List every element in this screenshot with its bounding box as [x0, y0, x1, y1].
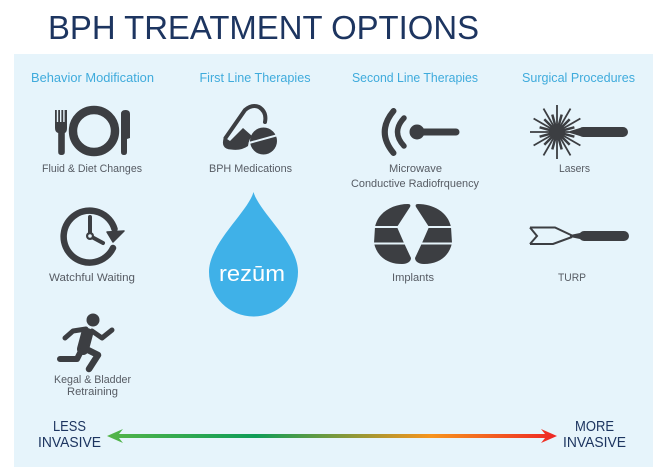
- label: less invasive: INVASIVE: [38, 435, 101, 451]
- icon: rezum water drop: [209, 192, 298, 316]
- label: BPH medications: BPH Medications: [209, 163, 292, 175]
- label: watchful waiting: Watchful Waiting: [49, 272, 135, 284]
- icon: prostate implants: [370, 204, 456, 264]
- heading: surgical procedures: Surgical Procedures: [522, 71, 635, 85]
- label: kegal and bladder retraining: [54, 374, 131, 398]
- label: fluid and diet changes: Fluid & Diet Changes: [42, 163, 142, 175]
- label: more invasive: INVASIVE: [563, 435, 626, 451]
- icon: clock with arrow: [64, 211, 124, 263]
- label: less invasive: [38, 419, 101, 451]
- heading: first line therapies: First Line Therapies: [200, 71, 310, 85]
- title: BPH TREATMENT OPTIONS: [48, 9, 479, 46]
- label: kegal and bladder retraining: Kegal & Bladder: [54, 374, 131, 386]
- icon: microwave probe: [385, 111, 456, 153]
- arrow: invasiveness scale: [107, 429, 557, 443]
- icon: medication pills: [223, 106, 278, 154]
- icon: TURP instrument: [530, 228, 629, 244]
- icon: running person: [60, 314, 112, 369]
- label: more invasive: MORE: [575, 419, 614, 435]
- icon: laser: [530, 105, 628, 159]
- icon: rezum water drop: rezūm: [219, 261, 285, 286]
- label: microwave conductive radiofrequency: Conductive Radiofrquency: [351, 178, 479, 190]
- label: microwave conductive radiofrequency: Microwave: [389, 163, 442, 175]
- label: less invasive: LESS: [53, 419, 86, 435]
- label: TURP: TURP: [558, 272, 586, 284]
- label: kegal and bladder retraining: Retraining: [67, 386, 118, 398]
- label: implants: Implants: [392, 272, 434, 284]
- heading: second line therapies: Second Line Therapies: [352, 71, 478, 85]
- label: more invasive: [563, 419, 626, 451]
- label: lasers: Lasers: [559, 163, 590, 175]
- heading: behavior modification: Behavior Modification: [31, 71, 154, 85]
- icon: fork, plate and knife: [55, 110, 130, 155]
- label: microwave conductive radiofrequency: [351, 163, 479, 190]
